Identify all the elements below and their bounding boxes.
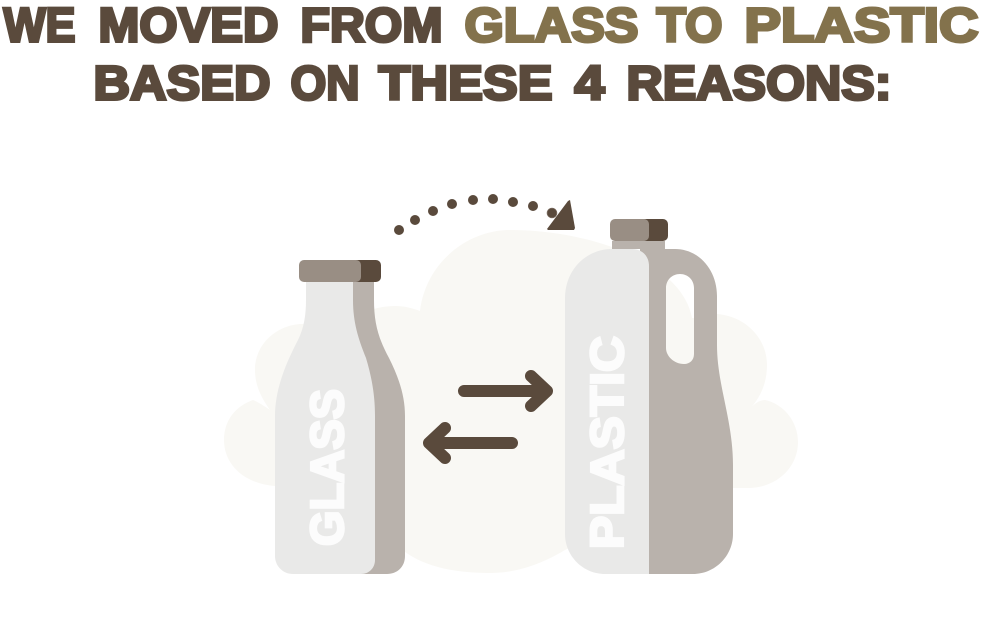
glass bottle bbox=[275, 260, 405, 574]
title line 2: REASONS: bbox=[626, 58, 892, 110]
title line 1: TO bbox=[656, 0, 722, 52]
title line 1 bbox=[4, 0, 978, 52]
bottle cap bbox=[299, 260, 381, 282]
title line 2 bbox=[94, 58, 892, 110]
plastic label: PLASTIC bbox=[581, 336, 633, 549]
title line 2: THESE bbox=[378, 58, 552, 110]
bottle back bbox=[340, 282, 405, 574]
right arrow bbox=[464, 376, 547, 406]
arrowhead bbox=[547, 200, 575, 230]
title line 1: WE bbox=[4, 0, 76, 52]
jug cap bbox=[610, 219, 668, 241]
left arrow bbox=[429, 428, 512, 458]
jug back bbox=[612, 241, 733, 574]
title line 1: GLASS bbox=[464, 0, 638, 52]
background cloud bbox=[224, 230, 798, 573]
bottle front bbox=[275, 282, 375, 574]
title line 2: 4 bbox=[574, 58, 605, 110]
title line 1: FROM bbox=[300, 0, 442, 52]
title line 1: MOVED bbox=[98, 0, 278, 52]
exchange arrows bbox=[429, 376, 547, 458]
jug front bbox=[565, 249, 649, 574]
dotted curved arrow bbox=[394, 194, 575, 235]
title bbox=[4, 0, 978, 110]
title line 1: PLASTIC bbox=[744, 0, 978, 52]
glass label: GLASS bbox=[301, 389, 353, 546]
title line 2: BASED bbox=[94, 58, 270, 110]
title line 2: ON bbox=[290, 58, 360, 110]
plastic jug bbox=[565, 219, 733, 574]
